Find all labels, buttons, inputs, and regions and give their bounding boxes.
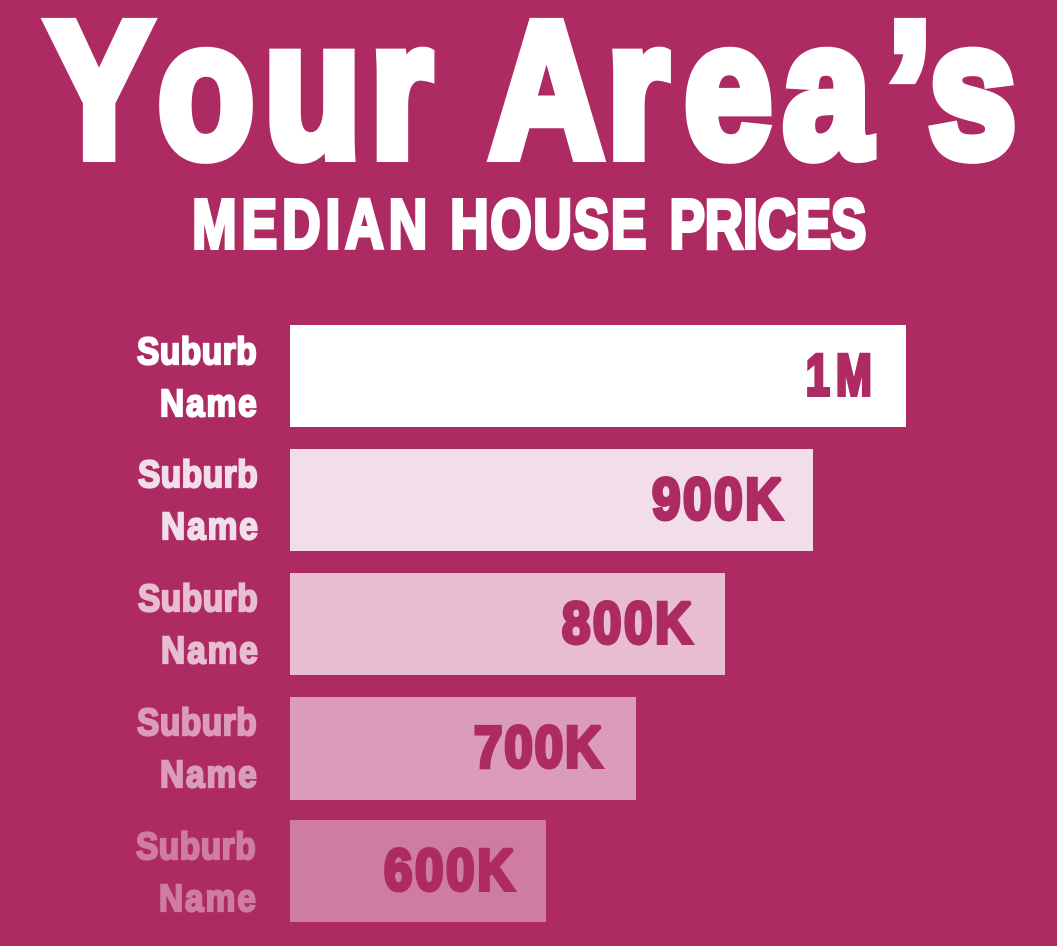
suburb 3 bar xyxy=(290,573,725,675)
suburb 1 label xyxy=(137,330,257,424)
suburb 5 label: Suburb xyxy=(136,825,256,867)
suburb 1 label: Suburb xyxy=(137,330,257,372)
suburb 3 label: Name xyxy=(161,629,258,671)
row: suburb 2 at 900K xyxy=(138,449,813,551)
suburb 2 label xyxy=(138,453,258,547)
suburb 4 value: 700K xyxy=(474,715,602,780)
suburb 4 bar xyxy=(290,697,636,800)
suburb 2 bar xyxy=(290,449,813,551)
suburb 2 label: Suburb xyxy=(138,453,258,495)
suburb 5 label xyxy=(136,825,256,919)
suburb 5 bar xyxy=(290,820,546,922)
suburb 3 label xyxy=(138,577,258,671)
suburb 1 bar xyxy=(290,325,906,427)
row: suburb 4 at 700K xyxy=(137,697,636,800)
suburb 5 label: Name xyxy=(159,877,256,919)
title xyxy=(47,0,1016,198)
row: suburb 3 at 800K xyxy=(138,573,725,675)
suburb 2 label: Name xyxy=(161,505,258,547)
subtitle: PRICES xyxy=(670,186,866,264)
suburb 1 value: 1M xyxy=(806,343,872,408)
subtitle: MEDIAN xyxy=(192,186,427,264)
suburb 1 label: Name xyxy=(160,382,257,424)
suburb 4 label: Suburb xyxy=(137,701,257,743)
suburb 2 value: 900K xyxy=(652,467,782,532)
suburb 3 label: Suburb xyxy=(138,577,258,619)
subtitle xyxy=(192,186,866,264)
subtitle: HOUSE xyxy=(450,186,646,264)
suburb 4 label xyxy=(137,701,257,795)
suburb 4 label: Name xyxy=(160,753,257,795)
row: suburb 1 at 1M xyxy=(137,325,906,427)
suburb 5 value: 600K xyxy=(384,838,514,903)
suburb 3 value: 800K xyxy=(562,591,692,656)
row: suburb 5 at 600K xyxy=(136,820,546,922)
